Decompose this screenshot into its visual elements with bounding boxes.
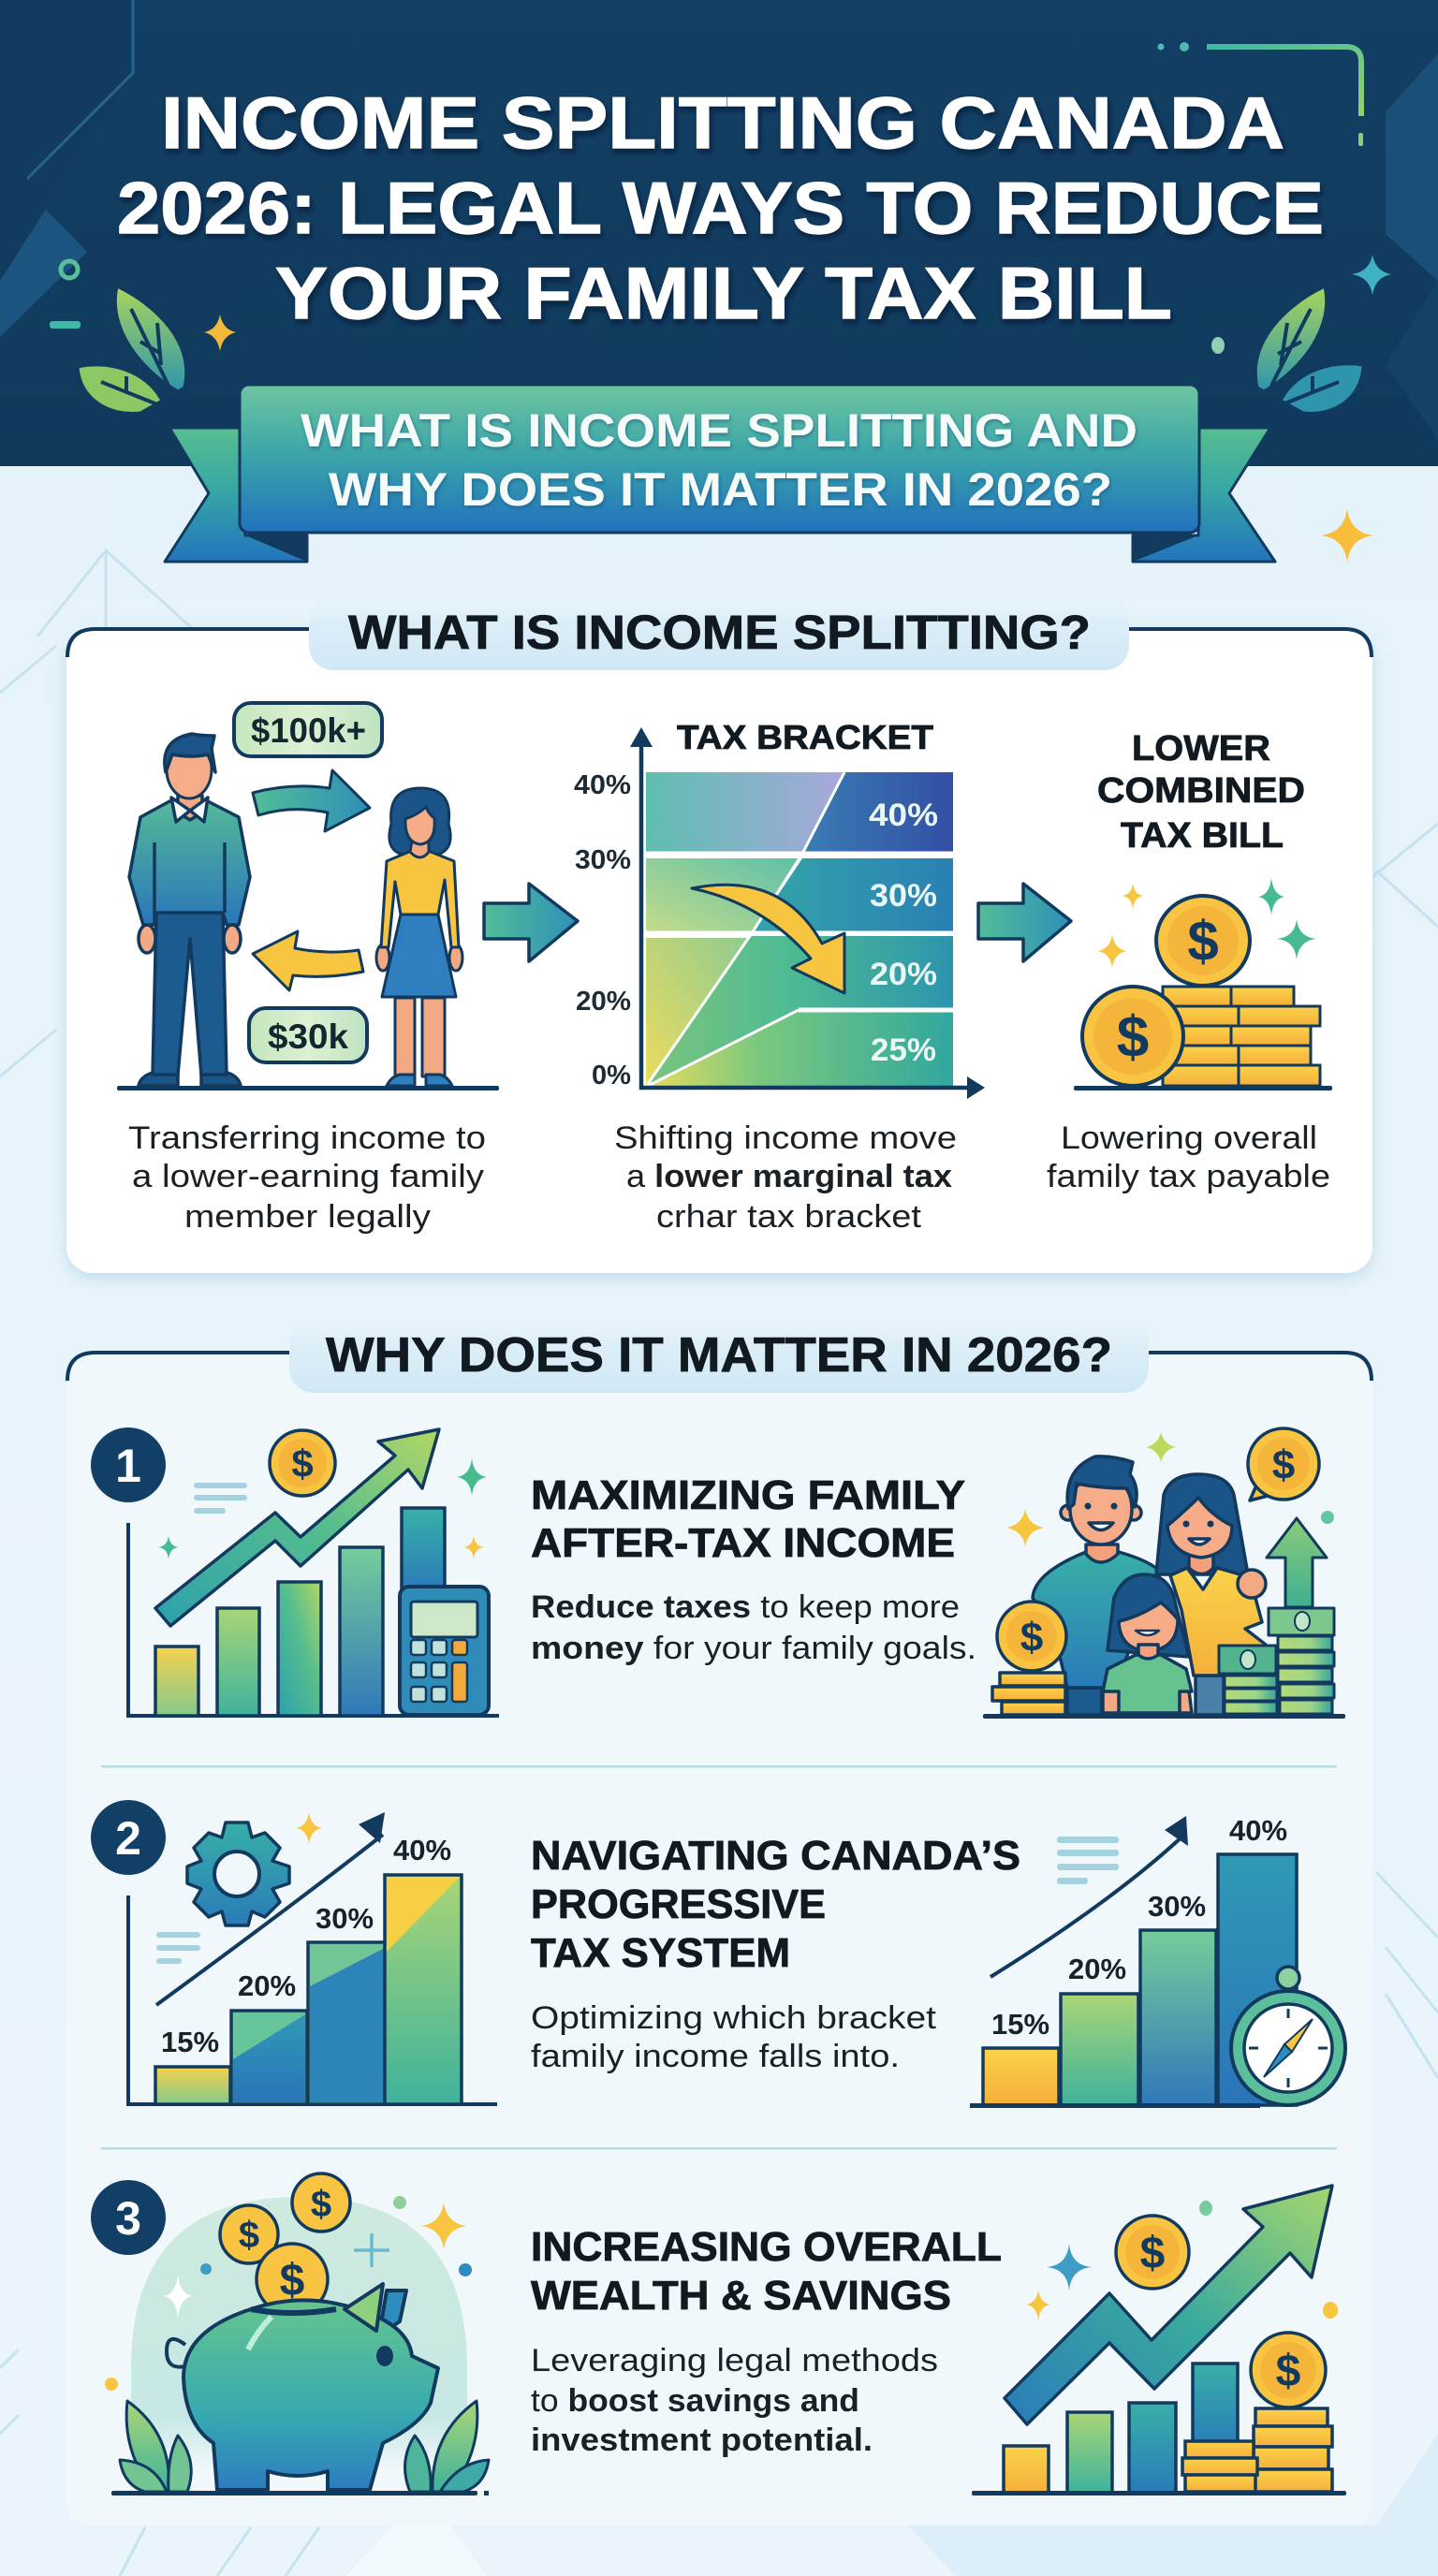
text: overall wealth: WEALTH & SAVINGS (531, 2273, 951, 2319)
icon: coin pile: $ (1187, 910, 1219, 973)
caption: lowering tax: family tax payable (1047, 1159, 1330, 1194)
caption: shifting income: a lower marginal tax (626, 1159, 952, 1194)
banner heading: WHY DOES IT MATTER IN 2026? (329, 463, 1112, 516)
text: overall wealth: Leveraging legal methods (531, 2343, 938, 2378)
value labels: 30% (1148, 1890, 1206, 1923)
result heading: COMBINED (1097, 771, 1305, 811)
bracket labels: 20% (870, 957, 937, 992)
axis labels: 40% (574, 770, 631, 800)
coin stack (992, 1673, 1065, 1715)
text: progressive tax system: TAX SYSTEM (531, 1930, 790, 1976)
sparkles and dots (105, 2196, 472, 2391)
bracket labels: 40% (869, 798, 938, 833)
caption: lowering tax (1047, 1120, 1330, 1194)
speech coin: $ (1272, 1442, 1295, 1488)
icon: gear (187, 1822, 289, 1925)
number badge 1 (91, 1427, 166, 1502)
title: 2026: LEGAL WAYS TO REDUCE (117, 167, 1324, 249)
number badge 2 (91, 1800, 166, 1875)
tag: $100k+ (234, 703, 382, 756)
ground line (117, 1086, 499, 1090)
icon: calculator (400, 1587, 489, 1715)
caption: transferring income: Transferring income to (128, 1120, 486, 1156)
arrow: income back (253, 931, 363, 990)
axis labels: 0% (592, 1061, 631, 1090)
coins: $ (1140, 2229, 1166, 2278)
chart: wealth growth (972, 2186, 1346, 2496)
caption: transferring income (128, 1120, 486, 1235)
text: progressive tax system: NAVIGATING CANADA’S (531, 1833, 1020, 1879)
illustration: man (129, 734, 250, 1086)
bracket labels: 30% (870, 878, 937, 914)
header bracket decoration (1157, 42, 1363, 146)
coins falling: $ (239, 2215, 259, 2256)
text: maximizing family: AFTER-TAX INCOME (531, 1520, 955, 1566)
up arrow (1267, 1518, 1327, 1607)
title: YOUR FAMILY TAX BILL (275, 252, 1172, 334)
chart: tax bracket (574, 718, 985, 1099)
arrow: zigzag growth (155, 1429, 439, 1626)
text: maximizing family: Reduce taxes to keep more (531, 1589, 960, 1625)
text: maximizing family: MAXIMIZING FAMILY (531, 1472, 965, 1518)
title: INCOME SPLITTING CANADA (161, 81, 1284, 164)
caption: shifting income: crhar tax bracket (656, 1199, 922, 1235)
chart: bracket bars with compass (970, 1814, 1345, 2108)
caption: shifting income (614, 1120, 957, 1235)
banner ribbon (165, 385, 1275, 562)
banner heading (301, 404, 1137, 516)
illustration: piggy bank (105, 2174, 489, 2496)
header band (0, 0, 1438, 466)
caption: shifting income: Shifting income move (614, 1120, 957, 1156)
value labels (161, 1834, 451, 2058)
icon: coin pile (1074, 878, 1332, 1090)
value labels: 15% (161, 2026, 219, 2058)
axis labels (574, 770, 631, 1090)
illustration: woman (376, 788, 462, 1086)
mother (1156, 1474, 1266, 1715)
coins: $ (1276, 2347, 1301, 2396)
axis labels: 20% (576, 987, 631, 1017)
text: overall wealth (531, 2224, 1002, 2458)
result heading: LOWER (1132, 729, 1270, 768)
coins falling (220, 2174, 350, 2315)
tag: $100k+: $100k+ (251, 711, 366, 750)
pig body (167, 2284, 438, 2490)
arrow: shift down (692, 885, 844, 993)
speech coin (1248, 1428, 1319, 1500)
value labels: 20% (238, 1969, 296, 2002)
text: progressive tax system (531, 1833, 1020, 2074)
coins (1116, 2216, 1326, 2408)
caption: lowering tax: Lowering overall (1061, 1120, 1317, 1156)
arrow: income to spouse (253, 770, 370, 831)
arrow: step to result (978, 884, 1071, 961)
value labels: 15% (991, 2008, 1049, 2041)
curve arrow (156, 1835, 383, 2005)
icon: coin pile: $ (1117, 1005, 1149, 1070)
text: overall wealth: investment potential. (531, 2422, 873, 2458)
value labels: 40% (1229, 1814, 1287, 1847)
caption: transferring income: a lower-earning family (132, 1159, 484, 1194)
number badge 2: 2 (115, 1812, 141, 1865)
chart axes (641, 739, 974, 1088)
arrow: zigzag growth (1005, 2186, 1332, 2424)
icon: right header ornaments (1211, 255, 1391, 414)
value labels (991, 1814, 1287, 2041)
text: progressive tax system: family income falls into. (531, 2039, 900, 2074)
section heading pill (289, 1318, 1149, 1393)
coins falling: $ (280, 2256, 305, 2305)
coin (997, 1602, 1066, 1671)
caption: transferring income: member legally (184, 1199, 431, 1235)
coins falling: $ (311, 2184, 331, 2225)
result heading: TAX BILL (1121, 816, 1284, 856)
section heading pill: WHY DOES IT MATTER IN 2026? (326, 1328, 1112, 1383)
text: progressive tax system: Optimizing which bracket (531, 2000, 937, 2036)
money stacks (1219, 1608, 1334, 1714)
coin stacks (1182, 2408, 1332, 2492)
text: overall wealth: INCREASING OVERALL (531, 2224, 1002, 2270)
icon: coin: $ (291, 1442, 314, 1486)
result heading (1097, 729, 1305, 856)
banner heading: WHAT IS INCOME SPLITTING AND (301, 404, 1137, 457)
section heading pill: WHAT IS INCOME SPLITTING? (348, 606, 1091, 659)
panel: why does it matter (66, 1318, 1372, 2525)
chart: rising bars with calculator (128, 1429, 499, 1716)
panel: what is income splitting (66, 595, 1372, 1273)
father (1033, 1456, 1161, 1715)
chart: stepped brackets with gear (128, 1812, 497, 2104)
sparkles (1026, 2201, 1338, 2321)
section heading pill (309, 595, 1129, 670)
text: progressive tax system: PROGRESSIVE (531, 1881, 826, 1927)
value labels: 30% (315, 1902, 374, 1935)
tag: $30k (249, 1008, 367, 1062)
text: maximizing family (531, 1472, 976, 1666)
divider (101, 2147, 1337, 2149)
divider (101, 1765, 1337, 1767)
icon: left header ornaments (50, 261, 236, 414)
plants (120, 2401, 489, 2492)
text: overall wealth: to boost savings and (531, 2383, 859, 2419)
icon: yellow sparkle (1321, 508, 1373, 563)
icon: coin (270, 1430, 335, 1496)
tag: $30k: $30k (268, 1017, 348, 1056)
arrow: step to chart (484, 884, 578, 961)
axis labels: 30% (575, 845, 631, 875)
number badge 3 (91, 2180, 166, 2255)
number badge 1: 1 (115, 1440, 141, 1492)
coin: $ (1020, 1615, 1043, 1661)
value labels: 20% (1068, 1953, 1126, 1985)
chart title: TAX BRACKET (677, 718, 933, 756)
bracket labels: 25% (871, 1032, 936, 1068)
child (1103, 1574, 1192, 1713)
illustration: family with money (983, 1428, 1345, 1719)
title (117, 81, 1324, 334)
value labels: 40% (393, 1834, 451, 1866)
bracket labels (869, 798, 938, 1068)
text: maximizing family: money for your family goals. (531, 1631, 976, 1666)
icon: compass (1231, 1967, 1345, 2105)
number badge 3: 3 (115, 2192, 141, 2245)
